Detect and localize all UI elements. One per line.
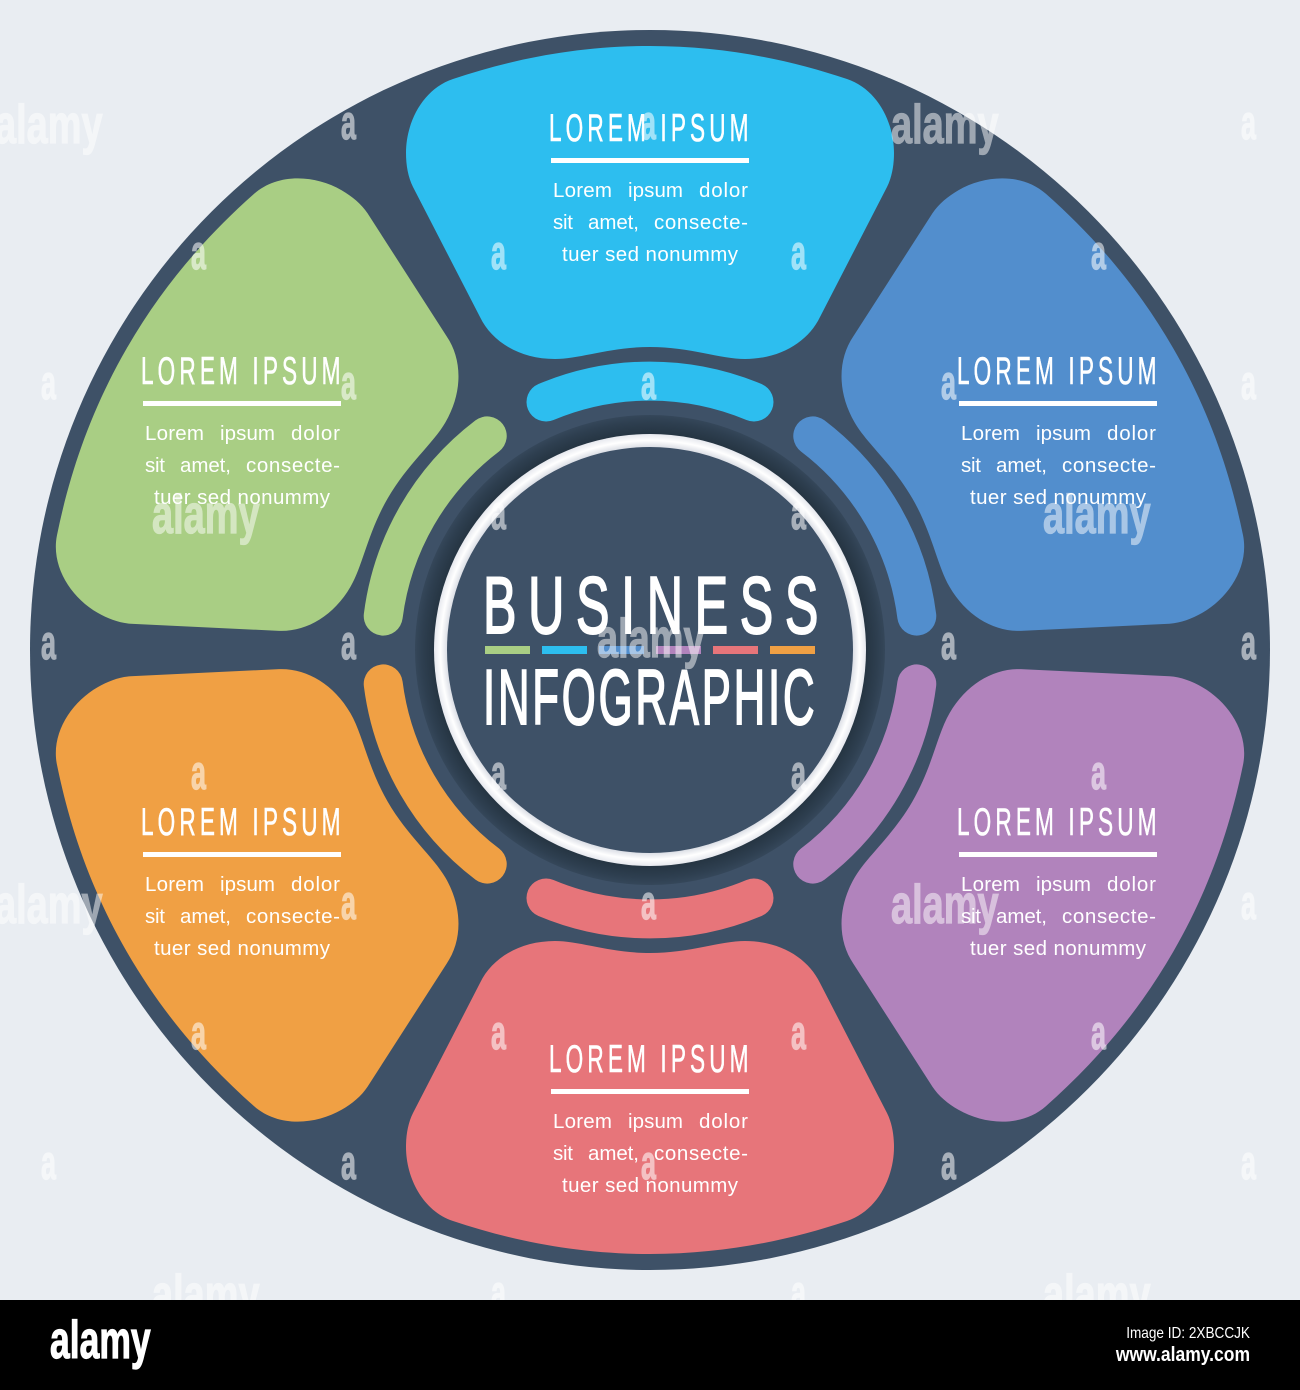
stock watermark: small marks: a [641,1137,656,1190]
title: INFOGRAPHIC: INFOGRAPHIC [483,655,815,741]
text block: upper left panel: Lorem [145,422,204,445]
stock watermark: small marks: a [41,617,56,670]
stock watermark: small marks: a [191,227,206,280]
stock watermark: small marks: a [791,1267,806,1320]
text block: top panel [549,106,749,266]
text block: upper right panel: Lorem [961,422,1020,445]
stock watermark: small marks: a [791,487,806,540]
text block: top panel: dolor [699,179,748,202]
stock watermark: small marks: a [941,617,956,670]
text block: lower right panel: ipsum [1036,873,1091,896]
text block: lower left panel: consecte- [246,905,340,928]
text block: bottom panel: ipsum [628,1110,683,1133]
stock watermark: small marks: a [41,357,56,410]
text block: upper right panel: ipsum [1036,422,1091,445]
stock watermark: small marks: a [491,227,506,280]
stock watermark: small marks: a [1091,747,1106,800]
text block: lower left panel: tuer sed nonummy [154,937,331,960]
stock watermark: small marks: a [341,97,356,150]
footer logo: alamy [50,1310,151,1370]
text block: lower right panel [957,800,1157,960]
text block: lower left panel: Lorem [145,873,204,896]
segment: sky blue top panel [406,46,894,359]
text block: bottom panel: amet, [588,1142,639,1165]
text block: top panel: tuer sed nonummy [562,243,739,266]
stock watermark: small marks: a [41,1137,56,1190]
inner arc: blue [813,425,935,616]
text block: top panel: consecte- [654,211,748,234]
footer bar [0,1300,1300,1390]
center disc [447,447,853,853]
stock watermark: small marks: a [1091,1007,1106,1060]
text block: upper left panel: ipsum [220,422,275,445]
text block: upper left panel: consecte- [246,454,340,477]
text block: top panel: ipsum [628,179,683,202]
inner arc: purple [813,684,935,875]
segment: coral bottom panel [406,941,894,1254]
stock watermark: small marks: a [341,617,356,670]
stock watermark: small marks: a [341,877,356,930]
stock watermark: large marks: alamy [152,1264,260,1326]
text block: bottom panel: consecte- [654,1142,748,1165]
stock watermark: large marks [0,94,1151,1326]
stock watermark: large marks: alamy [891,874,999,936]
text block: upper left panel: sit [145,454,165,477]
inner arc: sky blue [546,381,754,402]
text block: lower right panel: Lorem [961,873,1020,896]
segment: blue upper right panel [780,137,1295,716]
inner arc: orange [365,684,487,875]
text block: top panel: amet, [588,211,639,234]
center white ring [434,434,866,866]
stock watermark: small marks: a [641,97,656,150]
text block: bottom panel [549,1037,749,1197]
text block: lower right panel: amet, [996,905,1047,928]
segment: orange lower left panel [5,584,520,1163]
text block: lower right panel: consecte- [1062,905,1156,928]
inner arc: coral [546,898,754,919]
footer image id: Image ID: 2XBCCJK [1126,1325,1250,1342]
text block: upper left panel: amet, [180,454,231,477]
segment: green upper left panel [5,137,520,716]
text block: upper left panel: dolor [291,422,340,445]
footer website: www.alamy.com [1115,1343,1250,1365]
text block: lower left panel: dolor [291,873,340,896]
text block: lower left panel [141,800,341,960]
text block: lower left panel: sit [145,905,165,928]
stock watermark: small marks: a [491,1007,506,1060]
stock watermark: small marks: a [491,1267,506,1320]
title: BUSINESS: BUSINESS [483,561,818,651]
stock watermark: small marks: a [341,357,356,410]
text block: lower right panel: sit [961,905,981,928]
stock watermark: large marks: alamy [152,484,260,546]
stock watermark: small marks: a [641,877,656,930]
stock watermark: small marks: a [1241,617,1256,670]
stock watermark: small marks: a [941,357,956,410]
text block: upper right panel: sit [961,454,981,477]
stock watermark: small marks: a [491,747,506,800]
stock watermark: large marks: alamy [1043,1264,1151,1326]
segment: purple lower right panel [780,584,1295,1163]
text block: lower left panel: ipsum [220,873,275,896]
stock watermark: small marks: a [1241,357,1256,410]
text block: lower left panel: LOREM IPSUM [141,800,341,844]
text block: bottom panel: Lorem [553,1110,612,1133]
stock watermark: small marks: a [491,487,506,540]
title colour bars [485,646,815,654]
text block: top panel: LOREM IPSUM [549,106,749,150]
text block: bottom panel: tuer sed nonummy [562,1174,739,1197]
stock watermark: small marks: a [191,747,206,800]
text block: top panel: sit [553,211,573,234]
stock watermark: small marks: a [791,747,806,800]
text block: upper right panel: LOREM IPSUM [957,349,1157,393]
stock watermark: small marks: a [1091,227,1106,280]
text block: lower right panel: LOREM IPSUM [957,800,1157,844]
stock watermark: small marks: a [641,357,656,410]
center shadow ring [415,415,885,885]
text block: upper right panel [957,349,1157,509]
inner arc: green [365,425,487,616]
stock watermark: small marks: a [191,1007,206,1060]
stock watermark: small marks: a [341,1137,356,1190]
text block: lower right panel: dolor [1107,873,1156,896]
text block: bottom panel: LOREM IPSUM [549,1037,749,1081]
text block: lower right panel: tuer sed nonummy [970,937,1147,960]
text block: upper left panel: tuer sed nonummy [154,486,331,509]
stock watermark: large marks: alamy [1043,484,1151,546]
text block: upper left panel: LOREM IPSUM [141,349,341,393]
text block: lower left panel: amet, [180,905,231,928]
text block: upper right panel: consecte- [1062,454,1156,477]
text block: upper right panel: amet, [996,454,1047,477]
stock watermark: large marks: alamy [597,608,705,670]
stock watermark: small marks: a [1241,97,1256,150]
stock watermark: large marks: alamy [891,94,999,156]
stock watermark: small marks: a [1241,1137,1256,1190]
text block: upper right panel: dolor [1107,422,1156,445]
stock watermark: small marks: a [941,1137,956,1190]
text block: upper right panel: tuer sed nonummy [970,486,1147,509]
text block: upper left panel [141,349,341,509]
text block: bottom panel: dolor [699,1110,748,1133]
text block: top panel: Lorem [553,179,612,202]
stock watermark: small marks: a [1241,877,1256,930]
stock watermark: small marks: a [791,1007,806,1060]
stock watermark: small marks: a [791,227,806,280]
text block: bottom panel: sit [553,1142,573,1165]
